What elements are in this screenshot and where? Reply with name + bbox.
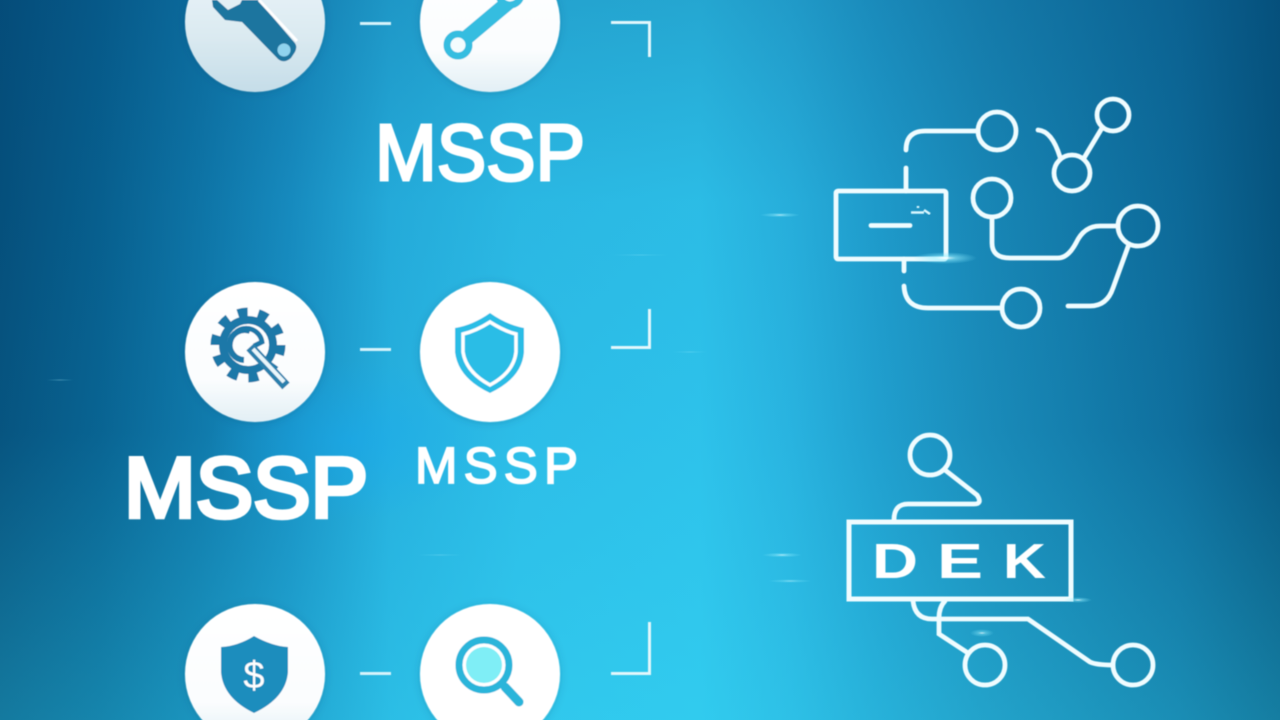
connector dash	[360, 348, 391, 351]
box lettering: E	[937, 535, 983, 589]
nodes	[910, 435, 1153, 685]
traces	[904, 128, 1129, 308]
chip small mark	[911, 206, 930, 214]
circuit diagram: upper	[836, 99, 1158, 327]
connector dash	[360, 672, 391, 675]
heading: MSSP large left: MSSP	[124, 441, 368, 536]
connector dash	[360, 22, 391, 25]
row 1	[185, 0, 650, 92]
nodes	[973, 99, 1158, 327]
traces	[894, 470, 1113, 665]
box lettering	[872, 535, 1046, 589]
box lettering: K	[1003, 535, 1046, 589]
icon: dollar shield: $	[243, 655, 265, 697]
label box	[849, 522, 1071, 599]
icon: wrench in grey-white circle	[185, 0, 325, 92]
corner bracket	[611, 309, 650, 348]
chip box	[836, 191, 946, 259]
icon: magnifier	[420, 604, 560, 720]
row 3	[185, 604, 650, 720]
corner bracket	[611, 22, 650, 57]
heading: MSSP spaced: MSSP	[415, 437, 578, 494]
row 2	[185, 282, 650, 422]
icon: dollar shield	[185, 604, 325, 720]
heading: MSSP top: MSSP	[375, 108, 585, 197]
icon: connector wrench in white circle	[420, 0, 560, 92]
corner bracket	[611, 622, 650, 674]
icon: gear and wrench	[185, 282, 325, 422]
chip dash	[871, 223, 910, 228]
light glints	[46, 212, 1092, 637]
circuit diagram: lower	[849, 435, 1153, 685]
icon: shield outline	[420, 282, 560, 422]
box lettering: D	[872, 535, 918, 589]
